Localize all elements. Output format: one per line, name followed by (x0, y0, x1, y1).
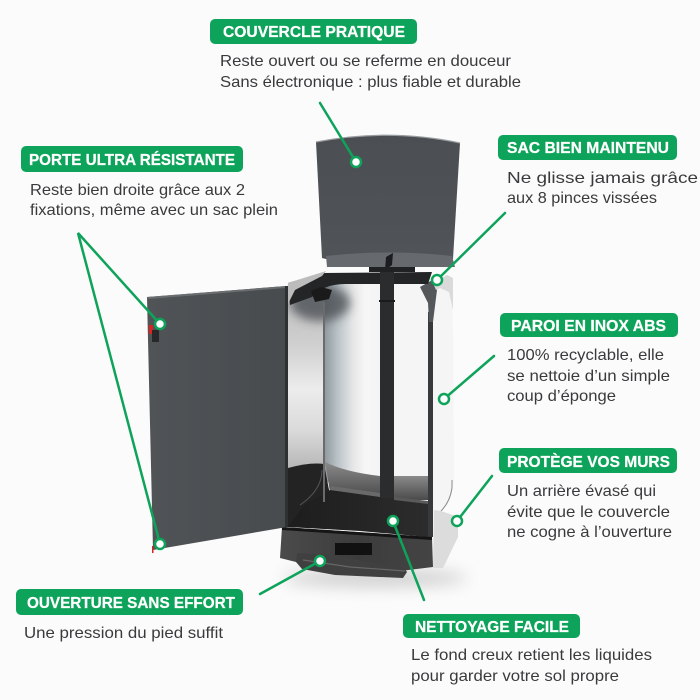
wire (300, 470, 322, 505)
panel: paroi en inox abs (500, 313, 678, 405)
panel: ouverture sans effort (16, 589, 243, 642)
base (280, 527, 433, 578)
panel: sac bien maintenu: aux 8 pinces vissées (507, 190, 657, 207)
right outer side (433, 278, 458, 568)
panel: paroi en inox abs: 100% recyclable, elle (507, 347, 664, 364)
dark wall reflection: centre (325, 462, 380, 498)
marker: paroi (439, 394, 449, 404)
panel: protège vos murs: PROTÈGE VOS MURS (507, 452, 670, 471)
panel: porte ultra résistante: fixations, même avec un sac plein (30, 202, 278, 219)
left post (323, 302, 325, 502)
inner dark stain (290, 285, 350, 321)
marker: porte haut (155, 319, 165, 329)
callout lines (78, 103, 505, 600)
marker: sac (432, 275, 442, 285)
panel: nettoyage facile: Le fond creux retient les liquides (411, 647, 652, 664)
panel: couvercle pratique: COUVERCLE PRATIQUE (223, 24, 405, 41)
panel: couvercle pratique: Reste ouvert ou se referme en douceur (220, 53, 512, 70)
panel: nettoyage facile (403, 614, 652, 685)
dark wall reflection: right (394, 476, 429, 500)
marker: pédale (315, 556, 325, 566)
panel: porte ultra résistante: PORTE ULTRA RÉSISTANTE (29, 150, 235, 169)
product: pedal bin with open door and lid (147, 135, 467, 587)
stainless left wall (288, 290, 324, 470)
panel: couvercle pratique: Sans électronique : plus fiable et durable (220, 74, 521, 91)
lid (316, 135, 460, 272)
marker: porte bas (155, 539, 165, 549)
panel: sac bien maintenu (498, 135, 698, 207)
floor (288, 490, 428, 537)
pedal (296, 553, 407, 578)
panel: protège vos murs (499, 448, 677, 541)
marker: murs (452, 516, 462, 526)
panel: protège vos murs: Un arrière évasé qui (507, 483, 656, 500)
panel: nettoyage facile: NETTOYAGE FACILE (415, 619, 569, 636)
lower dark reflection: left (288, 464, 330, 527)
panel: porte ultra résistante: Reste bien droite grâce aux 2 (30, 182, 245, 199)
central pole (380, 272, 394, 498)
panel: couvercle pratique (210, 19, 521, 91)
panel: protège vos murs: évite que le couvercle (507, 504, 670, 521)
panel: sac bien maintenu: SAC BIEN MAINTENU (507, 140, 669, 157)
stainless right wall (392, 282, 429, 477)
panel: paroi en inox abs: se nettoie d’un simple (507, 368, 670, 385)
panel: protège vos murs: ne cogne à l’ouverture (507, 524, 672, 541)
right post (428, 312, 433, 537)
panel: nettoyage facile: pour garder votre sol propre (411, 668, 619, 685)
hinge (311, 287, 332, 302)
panel: porte ultra résistante (21, 146, 278, 219)
panel: ouverture sans effort: Une pression du pied suffit (24, 625, 224, 642)
panel: ouverture sans effort: OUVERTURE SANS EFFORT (27, 595, 235, 612)
door (147, 286, 288, 553)
top frame (288, 272, 432, 305)
marker: fond (388, 516, 398, 526)
marker: couvercle (351, 157, 361, 167)
panel: paroi en inox abs: PAROI EN INOX ABS (511, 318, 666, 335)
panel: sac bien maintenu: Ne glisse jamais grâce (507, 170, 698, 187)
panel: paroi en inox abs: coup d’éponge (507, 388, 616, 405)
stainless centre wall (324, 282, 382, 482)
